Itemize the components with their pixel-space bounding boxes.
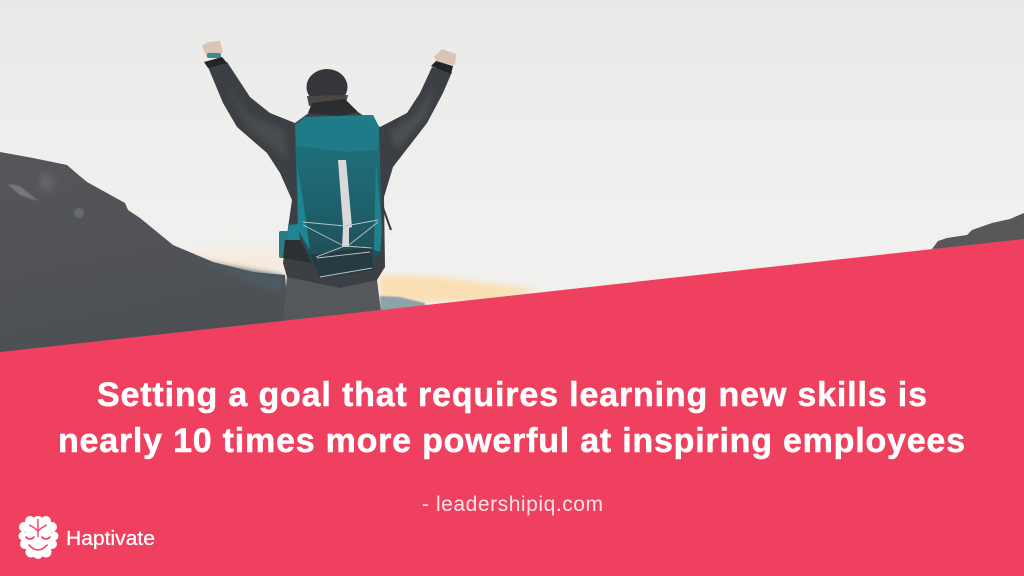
side pouch (279, 231, 288, 258)
backpack (279, 115, 391, 278)
side strap (382, 205, 391, 230)
right hand (431, 49, 456, 74)
source credit: - leadershipiq.com (422, 493, 603, 516)
collar (308, 99, 358, 116)
jacket shading (225, 85, 288, 160)
cords (303, 220, 378, 277)
left hand (202, 41, 227, 68)
jacket and arms (208, 62, 452, 288)
sunset glow (175, 250, 540, 302)
white strap (338, 160, 352, 247)
brand logo (18, 516, 155, 559)
distant ridge (380, 296, 425, 312)
headline quote (58, 376, 965, 460)
wordmark: Haptivate (66, 528, 155, 550)
hiker (202, 41, 456, 322)
sky (0, 0, 1024, 360)
headline line 2: nearly 10 times more powerful at inspiring employees (58, 422, 965, 460)
right mountain (932, 213, 1024, 249)
left mountain (0, 152, 290, 360)
icon: smiling brain (18, 516, 58, 559)
head (306, 69, 348, 105)
photo background: hiker on a mountain (0, 0, 1024, 360)
red diagonal panel (0, 239, 1024, 576)
trousers (283, 276, 381, 322)
headline line 1: Setting a goal that requires learning new skills is (97, 376, 927, 414)
